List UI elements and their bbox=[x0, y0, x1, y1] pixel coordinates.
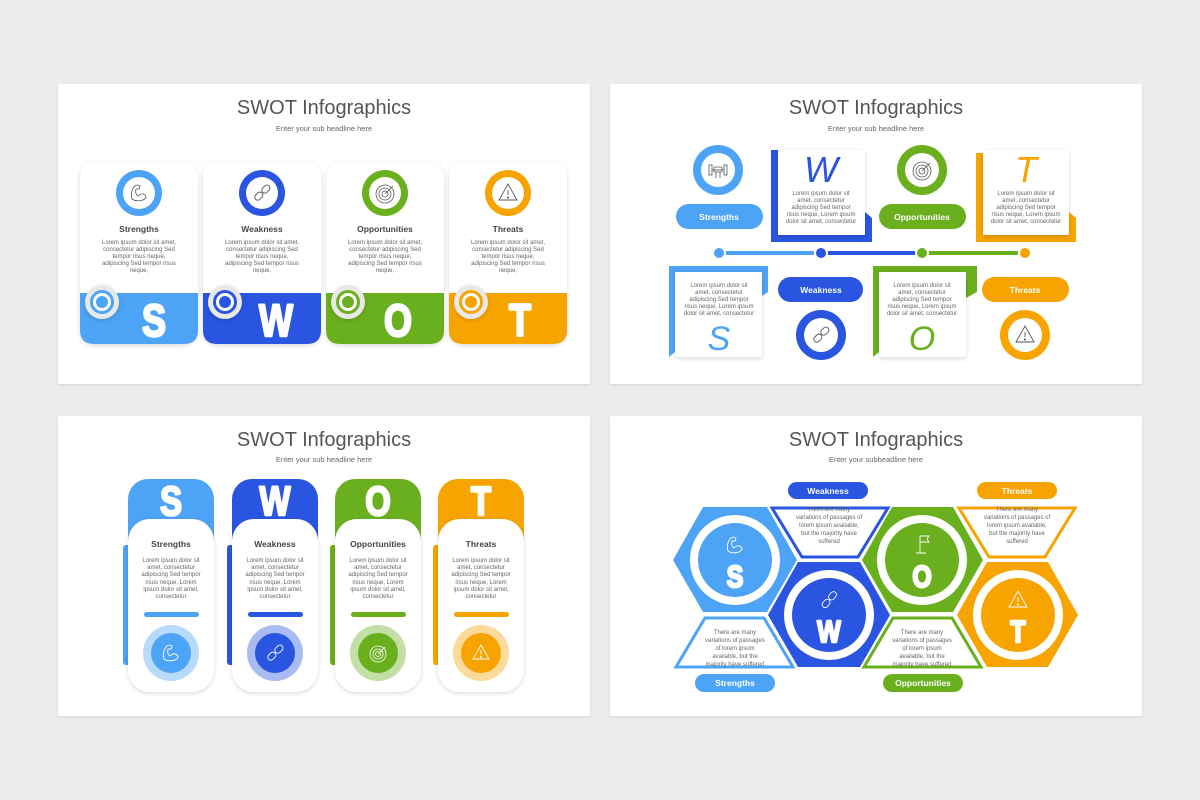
T card bbox=[976, 149, 1076, 242]
hexagon: S bbox=[673, 507, 797, 612]
hexagon: T bbox=[957, 562, 1078, 667]
column: strengths: adipiscing Sed tempor bbox=[141, 572, 201, 578]
outline trapezoid: opportunities text: majority have suffered bbox=[893, 662, 951, 668]
card: threats: Threats bbox=[493, 224, 524, 234]
outline trapezoid: strengths text: variations of passages bbox=[705, 638, 765, 644]
column: strengths: Lorem ipsum dolor sit bbox=[142, 558, 200, 564]
card: threats: adipiscing Sed tempor risus bbox=[471, 261, 545, 267]
hexagon: S: S bbox=[727, 559, 743, 594]
T card: amet, consectetur bbox=[1002, 198, 1050, 204]
card: strengths bbox=[80, 162, 198, 346]
outline trapezoid: strengths text: available, but the bbox=[712, 654, 758, 660]
card: weakness: adipiscing Sed tempor risus bbox=[225, 261, 299, 267]
column: strengths bbox=[123, 477, 214, 692]
hexagon: W: W bbox=[817, 614, 841, 649]
column: weakness: consectetur bbox=[259, 594, 291, 600]
card: weakness: consectetur adipiscing Sed bbox=[226, 247, 298, 253]
W card: adipiscing Sed tempor bbox=[791, 205, 851, 211]
column: threats: Threats bbox=[466, 539, 497, 549]
column: opportunities: ipsum dolor sit amet, bbox=[350, 587, 406, 593]
title: SWOT Infographics bbox=[237, 429, 411, 451]
card: opportunities: O bbox=[384, 295, 412, 346]
outline trapezoid: weakness text bbox=[772, 482, 888, 557]
column: threats bbox=[433, 477, 524, 692]
card: threats: Lorem ipsum dolor sit amet, bbox=[471, 240, 545, 246]
column: weakness: adipiscing Sed tempor bbox=[245, 572, 305, 578]
subtitle: Enter your sub headline here bbox=[276, 455, 372, 464]
outline trapezoid: weakness text: There are many bbox=[808, 507, 850, 513]
card: threats: tempor risus neque, bbox=[481, 254, 535, 260]
subtitle: Enter your sub headline here bbox=[828, 124, 924, 133]
O card: risus neque, Lorem ipsum bbox=[887, 304, 957, 310]
outline trapezoid: strengths text bbox=[676, 618, 793, 692]
W card bbox=[771, 149, 872, 242]
outline trapezoid: opportunities text: There are many bbox=[901, 630, 943, 636]
T card: Lorem ipsum dolor sit bbox=[997, 191, 1055, 197]
card: strengths: tempor risus neque, bbox=[112, 254, 166, 260]
S card: dolor sit amet, consectetur bbox=[684, 311, 754, 317]
column: threats: consectetur bbox=[465, 594, 497, 600]
strengths icon + pill: Strengths bbox=[699, 212, 739, 222]
outline trapezoid: threats text: but the majority have bbox=[989, 531, 1046, 537]
title: SWOT Infographics bbox=[789, 97, 963, 119]
column: threats: risus neque, Lorem bbox=[455, 580, 507, 586]
card: threats bbox=[449, 162, 567, 346]
column: weakness: Lorem ipsum dolor sit bbox=[246, 558, 304, 564]
card: opportunities: consectetur adipiscing Sed bbox=[349, 247, 421, 253]
column: strengths: ipsum dolor sit amet, bbox=[143, 587, 199, 593]
hexagon: O bbox=[862, 507, 983, 612]
outline trapezoid: threats text: lorem ipsum available, bbox=[987, 523, 1047, 529]
outline trapezoid: weakness text: variations of passages of bbox=[796, 515, 863, 521]
outline trapezoid: strengths text: of lorem ipsum bbox=[715, 646, 755, 652]
card: strengths: S bbox=[142, 295, 166, 346]
outline trapezoid: weakness text: Weakness bbox=[807, 486, 849, 496]
outline trapezoid: opportunities text: of lorem ipsum bbox=[902, 646, 942, 652]
column: strengths: risus neque, Lorem bbox=[145, 580, 197, 586]
T card: risus neque, Lorem ipsum bbox=[991, 212, 1061, 218]
outline trapezoid: threats text: variations of passages of bbox=[984, 515, 1051, 521]
O card: adipiscing Sed tempor bbox=[892, 297, 952, 303]
O card bbox=[873, 266, 977, 358]
timeline bbox=[713, 247, 1031, 259]
card: opportunities: Lorem ipsum dolor sit amet, bbox=[348, 240, 422, 246]
subtitle: Enter your subheadline here bbox=[829, 455, 923, 464]
outline trapezoid: strengths text: Strengths bbox=[715, 678, 755, 688]
outline trapezoid: opportunities text: variations of passages bbox=[892, 638, 952, 644]
title: SWOT Infographics bbox=[237, 97, 411, 119]
card: weakness: tempor risus neque, bbox=[235, 254, 289, 260]
S card: Lorem ipsum dolor sit bbox=[690, 283, 748, 289]
S card: amet, consectetur bbox=[695, 290, 743, 296]
column: opportunities: risus neque, Lorem bbox=[352, 580, 404, 586]
card: threats: T bbox=[509, 295, 531, 346]
W card: risus neque, Lorem ipsum bbox=[786, 212, 856, 218]
opportunities icon + pill: Opportunities bbox=[894, 212, 950, 222]
S card: S bbox=[708, 320, 731, 358]
slide 3: tabbed SWOT columns bbox=[58, 416, 590, 716]
outline trapezoid: threats text: suffered bbox=[1006, 539, 1028, 545]
T card: T bbox=[1015, 149, 1040, 190]
hexagon: O: O bbox=[912, 559, 932, 594]
column: strengths: S bbox=[160, 477, 182, 524]
card: weakness: Lorem ipsum dolor sit amet, bbox=[225, 240, 299, 246]
outline trapezoid: weakness text: lorem ipsum available, bbox=[799, 523, 859, 529]
T card: adipiscing Sed tempor bbox=[996, 205, 1056, 211]
card: strengths: neque, bbox=[130, 268, 149, 274]
card: weakness: neque, bbox=[253, 268, 272, 274]
card: opportunities bbox=[326, 162, 444, 346]
outline trapezoid: opportunities text: available, but the bbox=[899, 654, 945, 660]
T card: dolor sit amet, consectetur bbox=[991, 219, 1061, 225]
column: strengths: consectetur bbox=[155, 594, 187, 600]
threats pill + icon bbox=[982, 277, 1069, 360]
column: threats: T bbox=[471, 477, 491, 524]
outline trapezoid: threats text: Threats bbox=[1002, 486, 1033, 496]
O card: Lorem ipsum dolor sit bbox=[893, 283, 951, 289]
column: opportunities: Opportunities bbox=[350, 539, 406, 549]
column: threats: ipsum dolor sit amet, bbox=[453, 587, 509, 593]
card: weakness bbox=[203, 162, 321, 346]
card: strengths: Strengths bbox=[119, 224, 159, 234]
outline trapezoid: threats text: There are many bbox=[996, 507, 1038, 513]
hexagon: T: T bbox=[1010, 614, 1026, 649]
outline trapezoid: threats text bbox=[959, 482, 1075, 557]
weakness pill + icon bbox=[778, 277, 863, 360]
slide 1: SWOT cards with bottom letters bbox=[58, 84, 590, 384]
opportunities icon + pill bbox=[879, 145, 966, 229]
outline trapezoid: weakness text: suffered bbox=[818, 539, 840, 545]
column: opportunities: amet, consectetur bbox=[354, 565, 402, 571]
slide 4: hexagon SWOT bbox=[610, 416, 1142, 716]
column: weakness: risus neque, Lorem bbox=[249, 580, 301, 586]
outline trapezoid: opportunities text bbox=[864, 618, 981, 692]
card: weakness: Weakness bbox=[241, 224, 283, 234]
strengths icon + pill bbox=[676, 145, 763, 229]
weakness pill + icon: Weakness bbox=[800, 285, 842, 295]
card: strengths: consectetur adipiscing Sed bbox=[103, 247, 175, 253]
column: opportunities: Lorem ipsum dolor sit bbox=[349, 558, 407, 564]
hexagon: W bbox=[768, 562, 890, 667]
column: opportunities: adipiscing Sed tempor bbox=[348, 572, 408, 578]
column: weakness: W bbox=[260, 477, 290, 524]
column: weakness: Weakness bbox=[254, 539, 296, 549]
O card: O bbox=[909, 320, 935, 358]
column: weakness: ipsum dolor sit amet, bbox=[247, 587, 303, 593]
W card: W bbox=[804, 149, 841, 190]
S card: adipiscing Sed tempor bbox=[689, 297, 749, 303]
column: opportunities: consectetur bbox=[362, 594, 394, 600]
column: threats: amet, consectetur bbox=[457, 565, 505, 571]
O card: amet, consectetur bbox=[898, 290, 946, 296]
O card: dolor sit amet, consectetur bbox=[887, 311, 957, 317]
column: threats: Lorem ipsum dolor sit bbox=[452, 558, 510, 564]
column: strengths: Strengths bbox=[151, 539, 191, 549]
slide 2: timeline SWOT bbox=[610, 84, 1142, 384]
title: SWOT Infographics bbox=[789, 429, 963, 451]
card: strengths: Lorem ipsum dolor sit amet, bbox=[102, 240, 176, 246]
W card: Lorem ipsum dolor sit bbox=[792, 191, 850, 197]
card: threats: neque, bbox=[499, 268, 518, 274]
outline trapezoid: strengths text: There are many bbox=[714, 630, 756, 636]
column: strengths: amet, consectetur bbox=[147, 565, 195, 571]
column: weakness bbox=[227, 477, 318, 692]
card: opportunities: adipiscing Sed tempor risus bbox=[348, 261, 422, 267]
outline trapezoid: strengths text: majority have suffered bbox=[706, 662, 764, 668]
column: opportunities: O bbox=[365, 477, 391, 524]
outline trapezoid: opportunities text: Opportunities bbox=[895, 678, 951, 688]
card: opportunities: neque, bbox=[376, 268, 395, 274]
card: weakness: W bbox=[259, 295, 293, 346]
card: strengths: adipiscing Sed tempor risus bbox=[102, 261, 176, 267]
column: weakness: amet, consectetur bbox=[251, 565, 299, 571]
subtitle: Enter your sub headline here bbox=[276, 124, 372, 133]
card: opportunities: tempor risus neque, bbox=[358, 254, 412, 260]
outline trapezoid: weakness text: but the majority have bbox=[801, 531, 858, 537]
threats pill + icon: Threats bbox=[1010, 285, 1041, 295]
S card: risus neque, Lorem ipsum bbox=[684, 304, 754, 310]
W card: dolor sit amet, consectetur bbox=[786, 219, 856, 225]
card: opportunities: Opportunities bbox=[357, 224, 413, 234]
S card bbox=[669, 266, 768, 358]
column: threats: adipiscing Sed tempor bbox=[451, 572, 511, 578]
card: threats: consectetur adipiscing Sed bbox=[472, 247, 544, 253]
W card: amet, consectetur bbox=[797, 198, 845, 204]
column: opportunities bbox=[330, 477, 421, 692]
